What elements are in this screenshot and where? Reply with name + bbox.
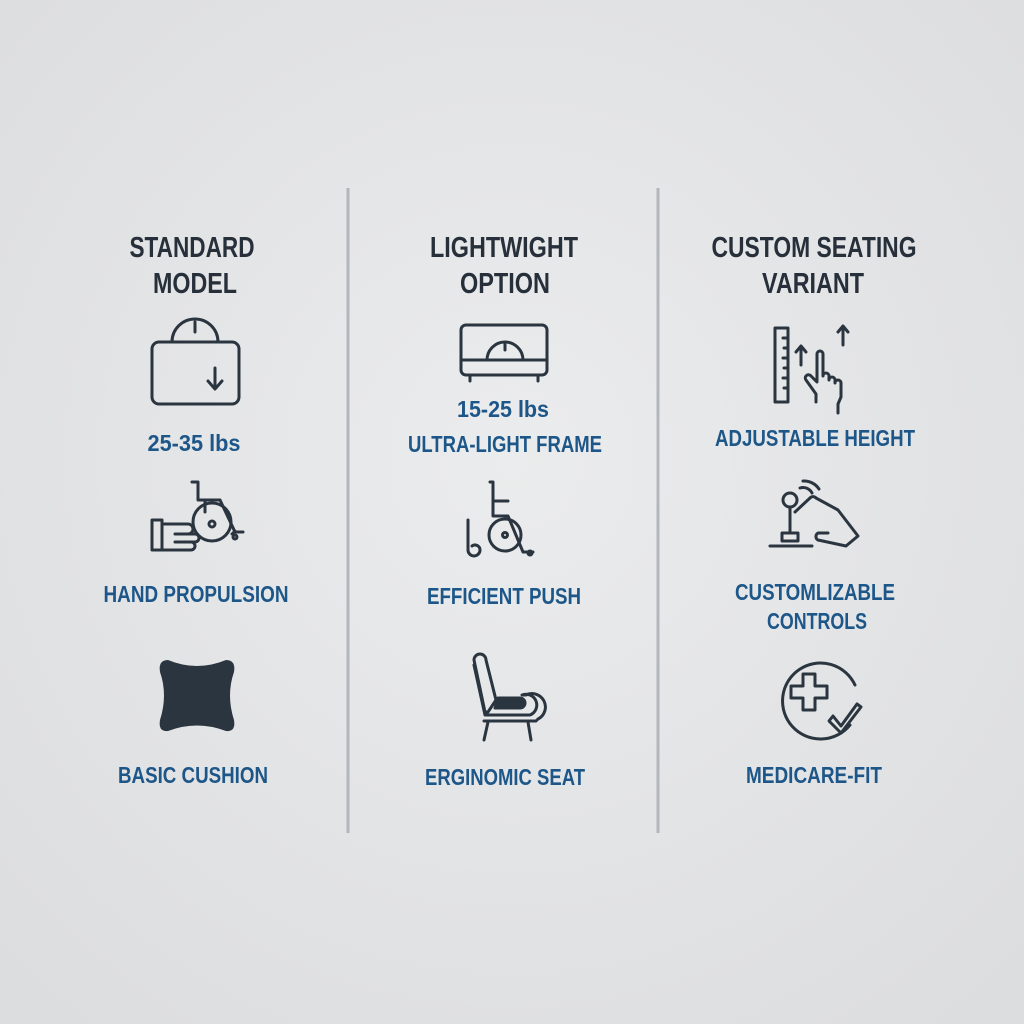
label: customizable controls bbox=[735, 579, 895, 634]
icon: hand propulsion bbox=[152, 482, 243, 550]
label: 25-35 lbs: 25-35 lbs bbox=[148, 430, 240, 456]
icon: adjustable height bbox=[775, 326, 848, 413]
label: 15-25 lbs: 15-25 lbs bbox=[457, 396, 549, 422]
panel: lightweight option bbox=[408, 232, 602, 790]
heading: standard model: MODEL bbox=[153, 268, 237, 300]
label: hand propulsion: HAND PROPULSION bbox=[104, 581, 288, 607]
icon: ergonomic seat bbox=[474, 654, 545, 740]
icon: scale bbox=[461, 325, 547, 381]
icon: joystick controls bbox=[770, 481, 858, 546]
label: customizable controls: CUSTOMLIZABLE bbox=[735, 579, 895, 605]
icon: basic cushion bbox=[160, 660, 234, 731]
label: medicare-fit: MEDICARE-FIT bbox=[746, 762, 882, 788]
label: efficient push: EFFICIENT PUSH bbox=[427, 583, 581, 609]
icon: wheelchair bbox=[468, 482, 533, 556]
label: adjustable height: ADJUSTABLE HEIGHT bbox=[715, 425, 915, 451]
icon: medicare fit bbox=[783, 663, 861, 739]
heading: lightweight option bbox=[430, 232, 578, 300]
panel: custom seating variant bbox=[712, 232, 916, 788]
heading: custom seating variant: VARIANT bbox=[762, 268, 864, 300]
label: ultra-light frame: ULTRA-LIGHT FRAME bbox=[408, 431, 602, 457]
label: customizable controls: CONTROLS bbox=[767, 608, 867, 634]
heading: lightweight option: LIGHTWIGHT bbox=[430, 232, 578, 264]
label: ergonomic seat: ERGINOMIC SEAT bbox=[425, 764, 585, 790]
heading: standard model: STANDARD bbox=[130, 232, 254, 264]
heading: custom seating variant bbox=[712, 232, 916, 300]
heading: lightweight option: OPTION bbox=[460, 268, 550, 300]
heading: standard model bbox=[130, 232, 254, 300]
label: basic cushion: BASIC CUSHION bbox=[118, 762, 268, 788]
icon: weight bag bbox=[152, 319, 239, 404]
heading: custom seating variant: CUSTOM SEATING bbox=[712, 232, 916, 264]
panel: standard model bbox=[104, 232, 288, 788]
